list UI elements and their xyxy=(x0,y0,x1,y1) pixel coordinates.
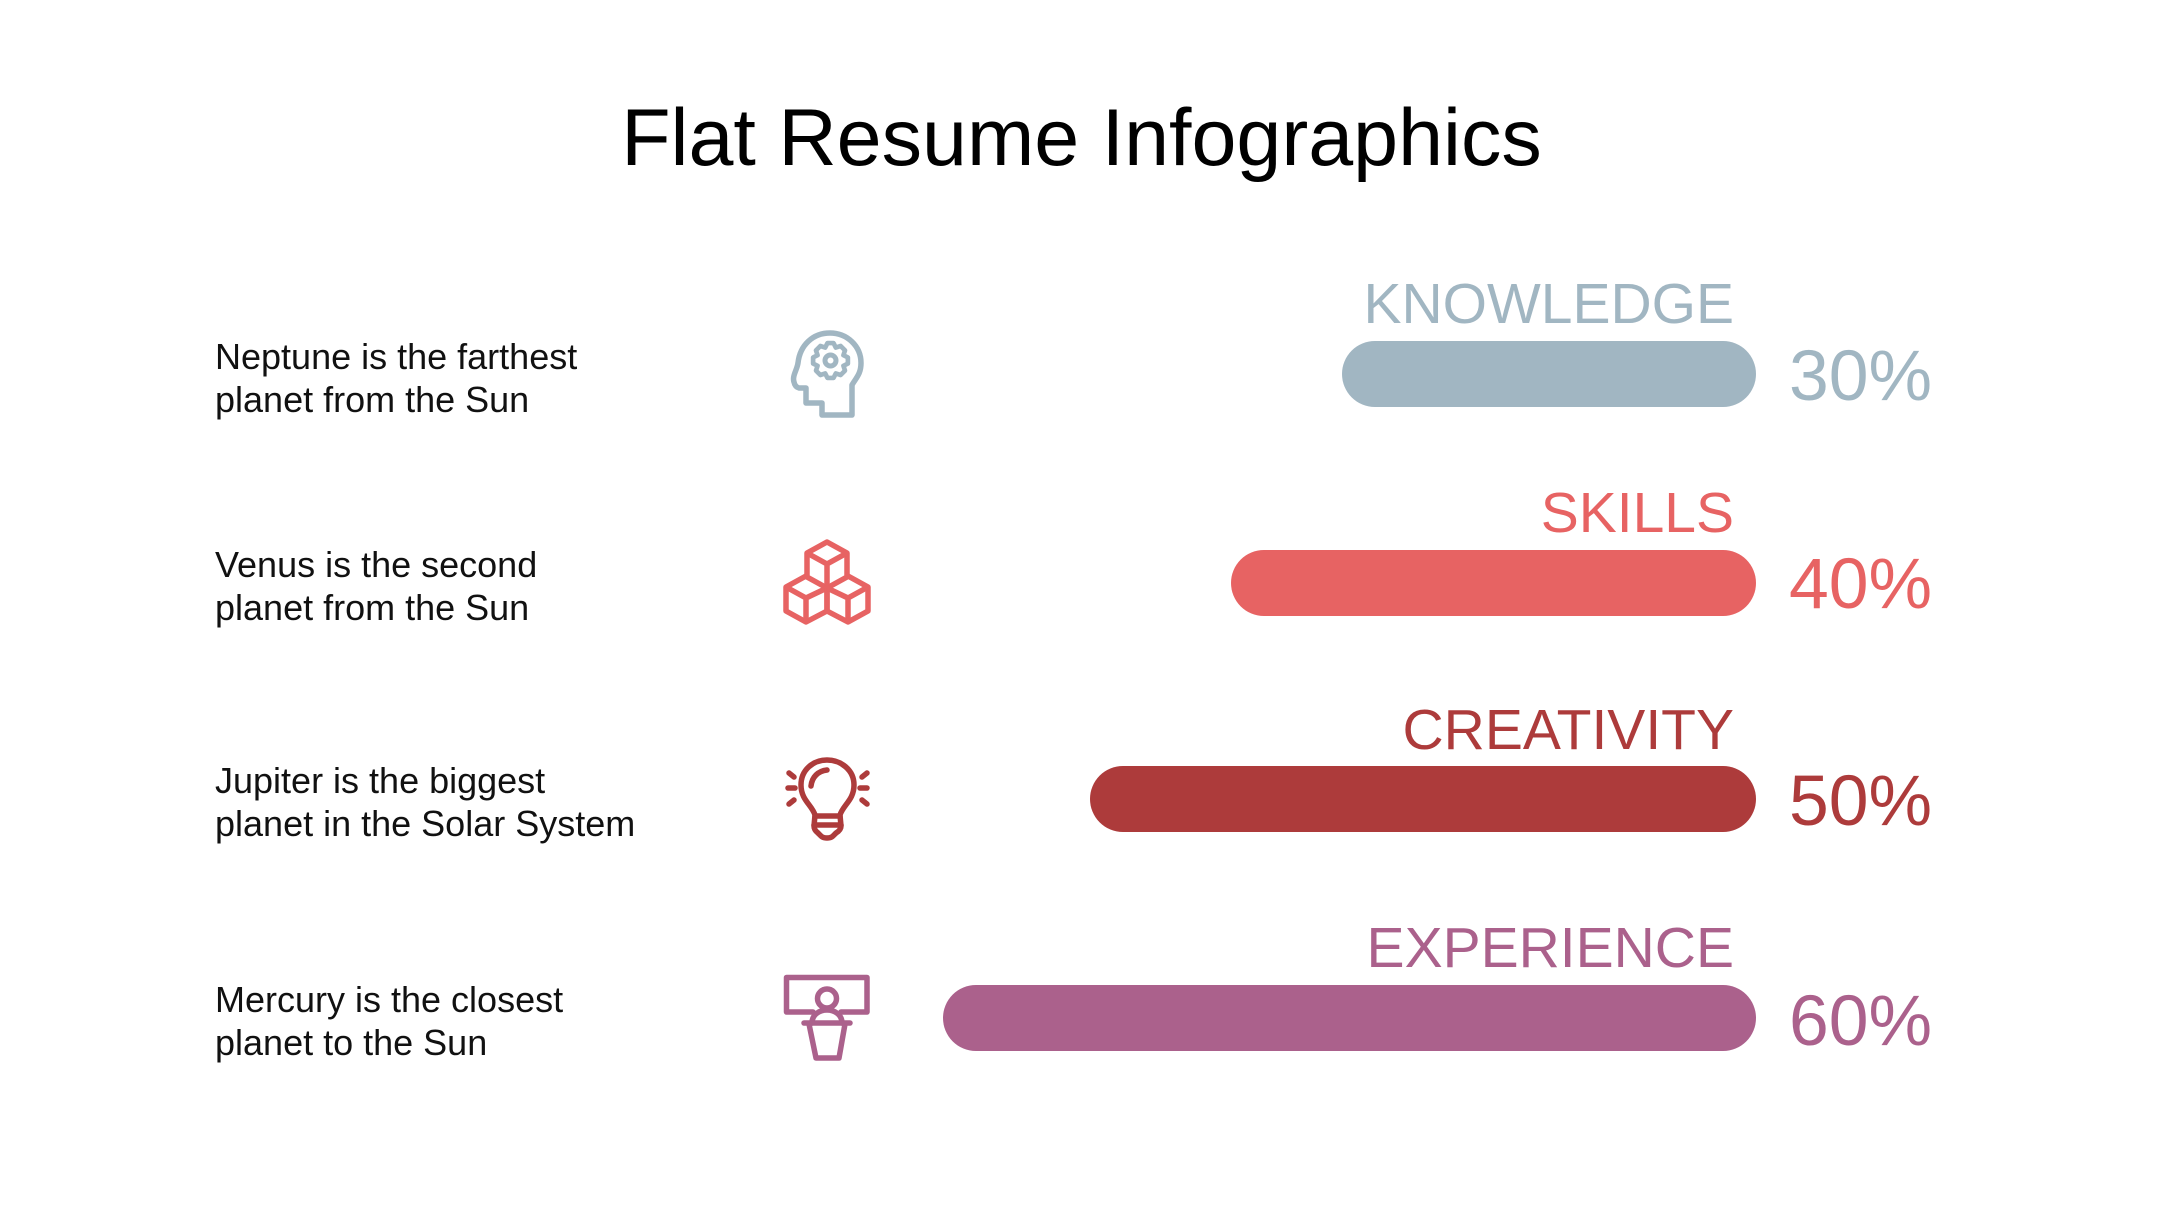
value: 60%: 60% xyxy=(1789,981,1932,1061)
text: Mercury: planet to the Sun xyxy=(215,1022,487,1063)
value: 50%: 50% xyxy=(1789,761,1932,841)
label: CREATIVITY: CREATIVITY xyxy=(1403,698,1734,762)
label: SKILLS: SKILLS xyxy=(1541,481,1734,545)
value: 40%: 40% xyxy=(1789,544,1932,624)
text: Venus: Venus is the second xyxy=(215,544,537,585)
text: Mercury: Mercury is the closest xyxy=(215,979,563,1020)
bar: 60% xyxy=(943,985,1756,1051)
icon: speaker at podium xyxy=(784,974,870,1061)
label: KNOWLEDGE: KNOWLEDGE xyxy=(1363,272,1734,336)
icon: head with gear xyxy=(790,330,864,418)
icon: cubes xyxy=(783,539,871,625)
bar: 40% xyxy=(1231,550,1756,616)
text: Jupiter xyxy=(215,760,635,844)
text: Jupiter: planet in the Solar System xyxy=(215,803,635,844)
bar: 30% xyxy=(1342,341,1756,407)
text: Neptune: Neptune is the farthest xyxy=(215,336,577,377)
value: 30%: 30% xyxy=(1789,336,1932,416)
bar: 50% xyxy=(1090,766,1756,832)
icon: light bulb xyxy=(785,757,870,841)
text: Jupiter: Jupiter is the biggest xyxy=(215,760,545,801)
title: Flat Resume Infographics xyxy=(621,93,1542,183)
label: EXPERIENCE: EXPERIENCE xyxy=(1367,916,1734,980)
text: Neptune xyxy=(215,336,577,420)
text: Venus xyxy=(215,544,537,628)
text: Venus: planet from the Sun xyxy=(215,587,529,628)
text: Mercury xyxy=(215,979,563,1063)
text: Neptune: planet from the Sun xyxy=(215,379,529,420)
